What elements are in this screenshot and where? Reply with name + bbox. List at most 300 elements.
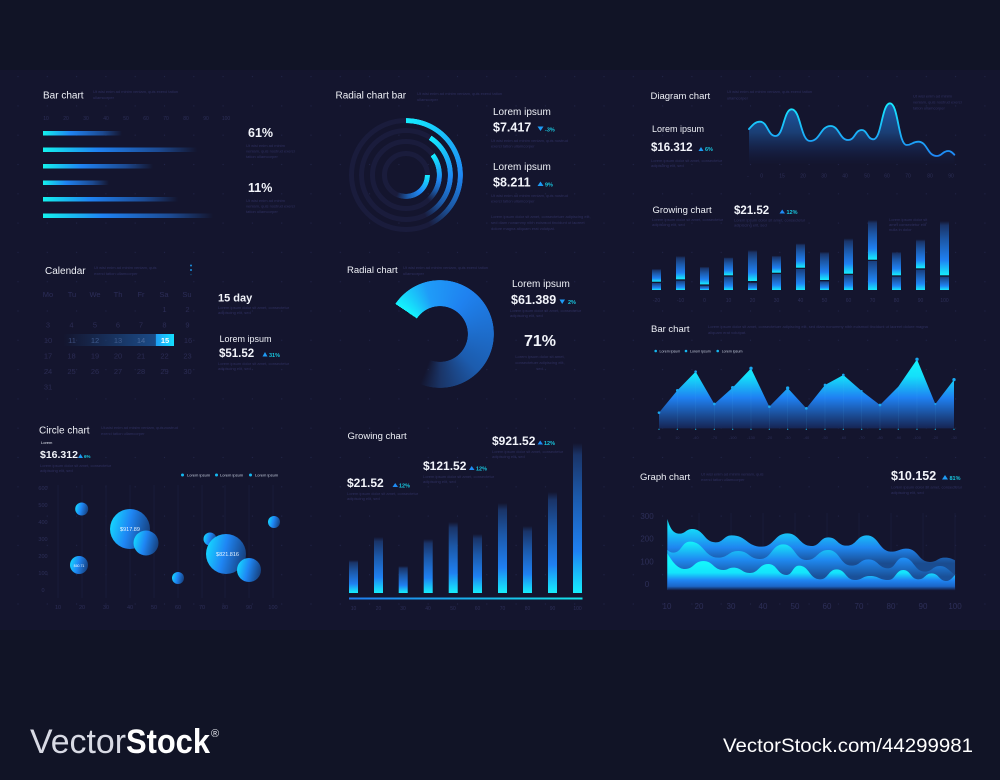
- watermark logo: ®: [211, 728, 219, 740]
- x axis labels: -100: [913, 435, 922, 440]
- description: [727, 89, 812, 100]
- x axis labels: 60: [846, 298, 851, 304]
- calendar days: 29: [160, 367, 169, 376]
- y axis labels: 200: [640, 534, 654, 544]
- axis labels: 20: [63, 116, 69, 122]
- stat: $7.417: -3%: [545, 128, 555, 134]
- ring tracks: [352, 120, 460, 230]
- x axis labels: 80: [887, 602, 896, 611]
- x axis labels: -5: [657, 435, 662, 440]
- description: Ut wisi enim ad minim veniam, quis exerci tation: [727, 89, 812, 94]
- stat: $8.211: [491, 162, 568, 204]
- x axis labels: 50: [151, 605, 157, 611]
- heading: radial chart bar: Radial chart bar: [336, 90, 407, 102]
- panel: graph chart: [640, 469, 963, 611]
- panel: bar chart: [43, 89, 295, 218]
- description: exerci tation ullamcorper: [94, 271, 138, 276]
- calendar days: 17: [44, 352, 52, 360]
- lower bars: [652, 261, 949, 290]
- stat: $921.52: $921.52: [492, 434, 536, 448]
- axis labels: 80: [183, 116, 189, 122]
- x axis labels: -130: [747, 435, 756, 440]
- stat: $21.52: $21.52: [734, 205, 769, 217]
- x axis labels: 70: [855, 602, 864, 611]
- stat: $7.417: Ut wisi enim ad minim veniam, quis nostrud: [491, 138, 568, 143]
- axis labels: [43, 116, 230, 122]
- bubble labels: $917.89: [120, 527, 140, 533]
- x axis labels: 70: [199, 605, 205, 611]
- stat: $8.211: Ut wisi enim ad minim veniam, quis nostrud: [491, 193, 568, 198]
- ring arc: second: [426, 136, 453, 216]
- x axis labels: -100: [729, 435, 737, 440]
- wave layers: [667, 519, 955, 590]
- y axis labels: 500: [38, 503, 48, 509]
- calendar days: 25: [67, 367, 76, 376]
- calendar days: 6: [116, 320, 120, 330]
- bubble labels: $60.71: [74, 564, 84, 568]
- stat: $51.52: [218, 334, 290, 371]
- calendar days: 13: [114, 336, 122, 345]
- stat: $121.52: [423, 459, 495, 484]
- x axis labels: [351, 606, 582, 612]
- calendar days: 2: [185, 305, 190, 314]
- stat: $8.211: Lorem ipsum: [493, 162, 551, 173]
- ring arc: third: [428, 154, 442, 200]
- stat: $10.152: adipiscing elit, sed: [891, 490, 924, 495]
- calendar days: 19: [91, 352, 99, 360]
- calendar days: 4: [69, 320, 74, 330]
- stat: 71%: Lorem ipsum dolor sit amet,: [515, 354, 565, 359]
- x axis labels: 50: [864, 174, 870, 180]
- stat: $21.52: adipiscing elit, sed: [734, 222, 767, 228]
- description: [93, 89, 178, 100]
- axis labels: 30: [83, 116, 89, 122]
- stat: $21.52: adipiscing elit, sed: [347, 496, 380, 501]
- x axis labels: -30: [785, 435, 791, 440]
- x axis labels: 20: [800, 174, 806, 180]
- grid lines: [699, 513, 955, 590]
- x axis labels: -60: [840, 435, 847, 440]
- x axis labels: 40: [127, 605, 133, 611]
- x axis labels: 60: [475, 606, 480, 612]
- heading: diagram chart: Diagram chart: [650, 91, 711, 102]
- x axis labels: 90: [246, 605, 252, 611]
- x axis labels: 70: [500, 606, 505, 612]
- long description: [491, 214, 591, 231]
- stat: 71%: consectetuer adipiscing elit,: [515, 360, 565, 365]
- stat: $16.312: Lorem ipsum dolor sit amet, consectetur: [651, 158, 723, 163]
- x axis labels: 30: [821, 174, 827, 180]
- background dot grid: [0, 70, 1000, 630]
- description: [403, 265, 488, 276]
- x axis labels: 0: [760, 174, 763, 180]
- stat: $16.312: 6%: [705, 147, 713, 153]
- x axis labels: -: [747, 174, 749, 180]
- axis labels: 40: [103, 116, 109, 122]
- calendar days: 20: [114, 352, 122, 360]
- stat: $21.52: $21.52: [347, 476, 384, 490]
- axis labels: 60: [143, 116, 149, 122]
- stat: $16.312: $16.312: [651, 142, 693, 154]
- stat: 71%: [515, 333, 565, 371]
- calendar weekdays: [43, 290, 192, 299]
- y axis labels: 200: [38, 554, 48, 560]
- x axis labels: [747, 174, 954, 180]
- description: [708, 324, 929, 335]
- stat: 15 day: Lorem ipsum dolor sit amet, consectetur: [218, 305, 290, 310]
- panel: circle chart: [38, 425, 280, 611]
- x axis labels: -40: [693, 435, 699, 440]
- side note: [889, 217, 928, 232]
- stat: $921.52: adipiscing elit, sed: [492, 454, 525, 459]
- calendar days: 30: [183, 367, 192, 376]
- description: exerci tation ullamcorper: [101, 431, 145, 436]
- x axis labels: -70: [711, 435, 718, 440]
- legend: [181, 472, 279, 478]
- x axis labels: 70: [870, 298, 875, 304]
- calendar weekdays: Sa: [159, 290, 169, 299]
- legend: Lorem ipsum: [220, 472, 244, 478]
- bubble labels: [74, 527, 239, 568]
- x axis labels: 30: [400, 606, 406, 612]
- y axis labels: 0: [645, 580, 650, 589]
- x axis labels: 10: [55, 605, 61, 611]
- legend: [654, 349, 742, 353]
- calendar days: 28: [137, 367, 145, 376]
- side note: Ut wisi enim ad minim: [913, 94, 953, 98]
- stat: $16.312: $16.312: [40, 449, 78, 461]
- axis labels: 50: [123, 116, 129, 122]
- x axis labels: 60: [884, 174, 890, 180]
- horizontal bars: [43, 131, 213, 218]
- stat: $10.152: 81%: [950, 476, 961, 482]
- x axis labels: 100: [940, 298, 949, 304]
- description: [701, 472, 763, 482]
- stat: $61.389: $61.389: [511, 293, 556, 307]
- y axis labels: 300: [38, 537, 48, 543]
- x axis labels: -10: [677, 298, 684, 304]
- x axis labels: 60: [175, 605, 181, 611]
- calendar weekdays: Tu: [68, 290, 76, 299]
- calendar days: 12: [91, 336, 99, 345]
- x axis labels: 90: [948, 174, 954, 180]
- x axis labels: 10: [351, 606, 356, 612]
- axis labels: 90: [203, 116, 209, 122]
- description: aliquam erat volutpat.: [708, 330, 746, 335]
- calendar days: 22: [160, 352, 169, 360]
- x axis labels: 0: [703, 298, 706, 304]
- heading: growing chart: Growing chart: [348, 431, 407, 442]
- stat: $16.312: Lorem: [41, 440, 53, 445]
- x axis labels: [55, 605, 278, 611]
- x axis labels: -20: [932, 435, 939, 440]
- description: ullamcorper: [727, 96, 749, 100]
- side note: tation ullamcorper: [913, 106, 945, 110]
- description: [94, 265, 156, 276]
- x axis labels: 100: [948, 602, 962, 611]
- selected day: [156, 334, 174, 346]
- x axis labels: 15: [779, 174, 785, 180]
- axis labels: 10: [43, 116, 49, 122]
- axis labels: 70: [163, 116, 169, 122]
- stat: $61.389: adipiscing elit, sed: [510, 313, 543, 318]
- calendar days: 9: [185, 320, 190, 330]
- calendar days: 11: [68, 336, 76, 345]
- y axis labels: [38, 486, 48, 594]
- x axis labels: 10: [663, 602, 672, 611]
- x axis labels: 50: [791, 602, 800, 611]
- stat: $16.312: adipiscing elit, sed: [40, 468, 73, 473]
- calendar days: 31: [44, 382, 52, 392]
- stat: $121.52: 12%: [476, 466, 487, 472]
- stat: 61%: Ut wisi enim ad minim: [246, 143, 286, 148]
- x axis labels: 10: [675, 435, 680, 440]
- watermark id: VectorStock.com/44299981: [723, 736, 973, 757]
- description: adipiscing elit, sed: [652, 222, 685, 227]
- x axis labels: 60: [823, 602, 832, 611]
- panel: bar chart right: [651, 324, 958, 440]
- panel: growing chart right: [652, 205, 949, 304]
- description: Lorem ipsum dolor sit amet, consectetuer adipiscing elit, sed diam nonummy nibh euismod tincidunt ut laoreet dolore magna: [708, 324, 929, 329]
- stat: $921.52: [492, 434, 564, 459]
- description: Ut wisi enim ad minim veniam, quis: [701, 472, 763, 476]
- base line: [349, 598, 582, 600]
- y axis labels: 300: [640, 512, 654, 521]
- stat: 15 day: 15 day: [218, 292, 253, 304]
- x axis labels: 40: [759, 602, 768, 611]
- stat: $921.52: Lorem ipsum dolor sit amet, consectetur: [492, 449, 564, 454]
- x axis labels: 20: [376, 606, 381, 612]
- stat: $61.389: [510, 279, 582, 318]
- stat: $51.52: Lorem ipsum dolor sit amet, consectetur: [218, 361, 290, 366]
- x axis labels: 90: [550, 606, 555, 612]
- stat: 11%: Ut wisi enim ad minim: [246, 198, 286, 203]
- y axis labels: 100: [640, 558, 654, 566]
- x axis labels: 80: [894, 298, 899, 304]
- stat: $16.312: [651, 124, 723, 168]
- y axis labels: 600: [38, 486, 48, 492]
- stat: $10.152: [891, 469, 963, 495]
- x axis labels: 20: [79, 605, 85, 611]
- panel: radial chart bar: [336, 90, 591, 235]
- x axis labels: 30: [727, 602, 736, 611]
- x axis labels: -30: [951, 435, 958, 440]
- description: [652, 217, 724, 227]
- stat: 11%: veniam, quis nostrud exerci: [246, 204, 295, 208]
- legend: Lorem ipsum: [255, 472, 279, 478]
- side note: Lorem ipsum dolor sit: [889, 217, 928, 222]
- watermark logo: Vector: [30, 723, 126, 761]
- x axis labels: -70: [859, 435, 865, 440]
- bubbles: [70, 502, 280, 584]
- description: Ut wisi enim ad minim veniam, quis exerci tation: [93, 89, 178, 94]
- stat: 61%: tation ullamcorper: [246, 154, 278, 159]
- x axis labels: 90: [919, 602, 928, 611]
- side note: veniam, quis nostrud exerci: [913, 100, 962, 104]
- heading: graph chart: Graph chart: [640, 472, 691, 483]
- x axis labels: -20: [766, 435, 773, 440]
- heading: calendar: Calendar: [45, 266, 86, 277]
- calendar weekdays: Fr: [137, 290, 145, 299]
- stat: 11%: 11%: [248, 181, 272, 195]
- legend: Lorem ipsum: [187, 472, 211, 478]
- x axis labels: 30: [103, 605, 109, 611]
- stat: 15 day: [218, 292, 290, 315]
- donut: [396, 280, 494, 388]
- stat: $121.52: adipiscing elit, sed: [423, 479, 456, 484]
- long description: sed diam nonummy nibh euismod tincidunt ut laoreet: [491, 220, 585, 225]
- panel: radial chart: [347, 265, 582, 390]
- stat: $21.52: 12%: [399, 484, 410, 490]
- x axis labels: [657, 435, 958, 440]
- heading: bar chart: Bar chart: [43, 90, 84, 102]
- calendar days: 14: [137, 336, 145, 345]
- calendar days: 18: [67, 352, 76, 360]
- stat: $61.389: 2%: [568, 300, 576, 306]
- x axis labels: -40: [803, 435, 810, 440]
- description: ullamcorper: [93, 95, 115, 100]
- stat: $21.52: Lorem ipsum dolor sit amet, consectetur: [347, 491, 419, 496]
- x axis labels: 50: [822, 298, 827, 304]
- ring arc: outer: [406, 118, 463, 225]
- area chart: [658, 358, 956, 430]
- stat: $10.152: $10.152: [891, 469, 936, 483]
- stat: $121.52: $121.52: [423, 459, 467, 473]
- stat: $921.52: 12%: [544, 441, 555, 447]
- stat: 15 day: adipiscing elit, sed: [218, 310, 251, 315]
- description: ullamcorper: [417, 97, 439, 102]
- x axis labels: 40: [425, 606, 431, 612]
- description: [101, 425, 178, 436]
- x axis labels: -20: [653, 298, 660, 304]
- calendar weekdays: Th: [114, 290, 122, 299]
- panel: calendar: [43, 264, 290, 392]
- x axis labels: 70: [905, 174, 911, 180]
- upper bars: [652, 220, 949, 284]
- stat: $7.417: Lorem ipsum: [493, 107, 551, 118]
- x axis labels: 100: [573, 606, 582, 612]
- stat: 61%: 61%: [248, 126, 273, 140]
- stat: $21.52: [347, 476, 419, 501]
- stat: $51.52: adipiscing elit, sed: [218, 366, 251, 371]
- calendar days: 16: [184, 336, 192, 345]
- dashboard background panel: [0, 70, 1000, 630]
- stat: $8.211: exerci tation ullamcorper: [491, 198, 535, 204]
- legend: Lorem ipsum: [722, 349, 742, 353]
- ring arc: inner: [397, 175, 430, 199]
- x axis labels: 10: [726, 298, 731, 304]
- stat: $21.52: Lorem ipsum dolor sit amet, consectetur: [734, 218, 806, 222]
- panel: growing chart center: [347, 431, 582, 612]
- stat: $51.52: $51.52: [219, 348, 254, 360]
- calendar days: 15: [161, 336, 169, 345]
- stat: 61%: [246, 126, 295, 159]
- stat: $10.152: Lorem ipsum dolor sit amet, consectetur: [891, 484, 963, 490]
- stat: 11%: [246, 181, 295, 214]
- x axis labels: 50: [450, 606, 456, 612]
- stat: $8.211: $8.211: [493, 176, 531, 190]
- stat: $16.312: Lorem ipsum dolor sit amet, consectetur: [40, 463, 112, 468]
- description: Ut wisi enim ad minim veniam, quis nostrud: [101, 425, 178, 430]
- stat: $61.389: Lorem ipsum dolor sit amet, consectetur: [510, 308, 582, 313]
- x axis labels: [663, 602, 962, 611]
- x axis labels: 100: [268, 605, 278, 611]
- description: Lorem ipsum dolor sit amet, consectetur: [652, 217, 724, 222]
- icon: menu dots: [190, 264, 192, 275]
- stat: $121.52: Lorem ipsum dolor sit amet, consectetur: [423, 474, 495, 479]
- axis labels: 100: [222, 116, 230, 122]
- stat: $21.52: 12%: [786, 210, 798, 216]
- stat: 71%: 71%: [524, 333, 556, 350]
- legend: Lorem ipsum: [690, 349, 711, 353]
- calendar days: 7: [139, 320, 143, 330]
- y axis labels: 100: [38, 571, 48, 577]
- vertical grid lines: [58, 485, 273, 598]
- x axis labels: 20: [695, 602, 704, 611]
- bubble labels: $821.816: [216, 552, 239, 558]
- heading: circle chart: Circle chart: [39, 426, 90, 436]
- calendar days: 24: [44, 367, 52, 376]
- y axis labels: 400: [38, 520, 48, 526]
- side note: nulla in dolor: [889, 227, 912, 232]
- description: exerci tation ullamcorper: [701, 477, 745, 482]
- description: ullamcorper: [403, 271, 425, 276]
- x axis labels: -80: [877, 435, 884, 440]
- stat: $51.52: 31%: [269, 353, 280, 359]
- stat: 11%: tation ullamcorper: [246, 209, 278, 214]
- x axis labels: 80: [222, 605, 228, 611]
- x axis labels: 90: [918, 298, 923, 304]
- heading: growing chart: Growing chart: [652, 205, 712, 216]
- stat: $16.312: 6%: [84, 454, 91, 459]
- x axis labels: 20: [750, 298, 755, 304]
- watermark logo: Stock: [126, 723, 210, 761]
- stat: $16.312: [40, 440, 112, 473]
- side note: [913, 94, 962, 110]
- calendar weekdays: Su: [182, 290, 192, 299]
- x axis labels: 40: [842, 174, 848, 180]
- stat: $8.211: 9%: [545, 182, 553, 188]
- heading: radial chart: Radial chart: [347, 265, 398, 276]
- y axis labels: 0: [41, 588, 45, 594]
- x axis labels: 80: [927, 174, 933, 180]
- stat: 71%: sed.: [536, 366, 544, 371]
- y axis labels: [640, 512, 654, 589]
- bars: [349, 443, 582, 593]
- heading: bar chart: Bar chart: [651, 324, 690, 335]
- long description: Lorem ipsum dolor sit amet, consectetuer adipiscing elit,: [491, 214, 591, 219]
- panel: diagram chart: [650, 89, 962, 180]
- stat: $51.52: Lorem ipsum: [220, 334, 272, 344]
- stat: $21.52: [734, 205, 806, 228]
- stat: $16.312: adipiscing elit, sed: [651, 163, 684, 168]
- watermark logo: [30, 723, 219, 761]
- side note: amet consectetur elit: [889, 222, 927, 227]
- calendar days: 27: [114, 367, 122, 376]
- x axis labels: -90: [895, 435, 902, 440]
- calendar days: 23: [183, 352, 192, 360]
- description: Ut wisi enim ad minim veniam, quis exerci tation: [417, 91, 502, 96]
- x axis labels: -50: [822, 435, 829, 440]
- calendar days: 10: [44, 336, 52, 345]
- stat: $61.389: Lorem ipsum: [512, 279, 570, 290]
- calendar weekdays: We: [89, 290, 101, 299]
- x axis labels: 30: [774, 298, 779, 304]
- stat: $7.417: $7.417: [493, 120, 531, 134]
- description: Ut wisi enim ad minim veniam, quis: [94, 265, 156, 270]
- calendar days: 26: [91, 367, 99, 376]
- long description: dolore magna aliquam erat volutpat.: [491, 226, 555, 231]
